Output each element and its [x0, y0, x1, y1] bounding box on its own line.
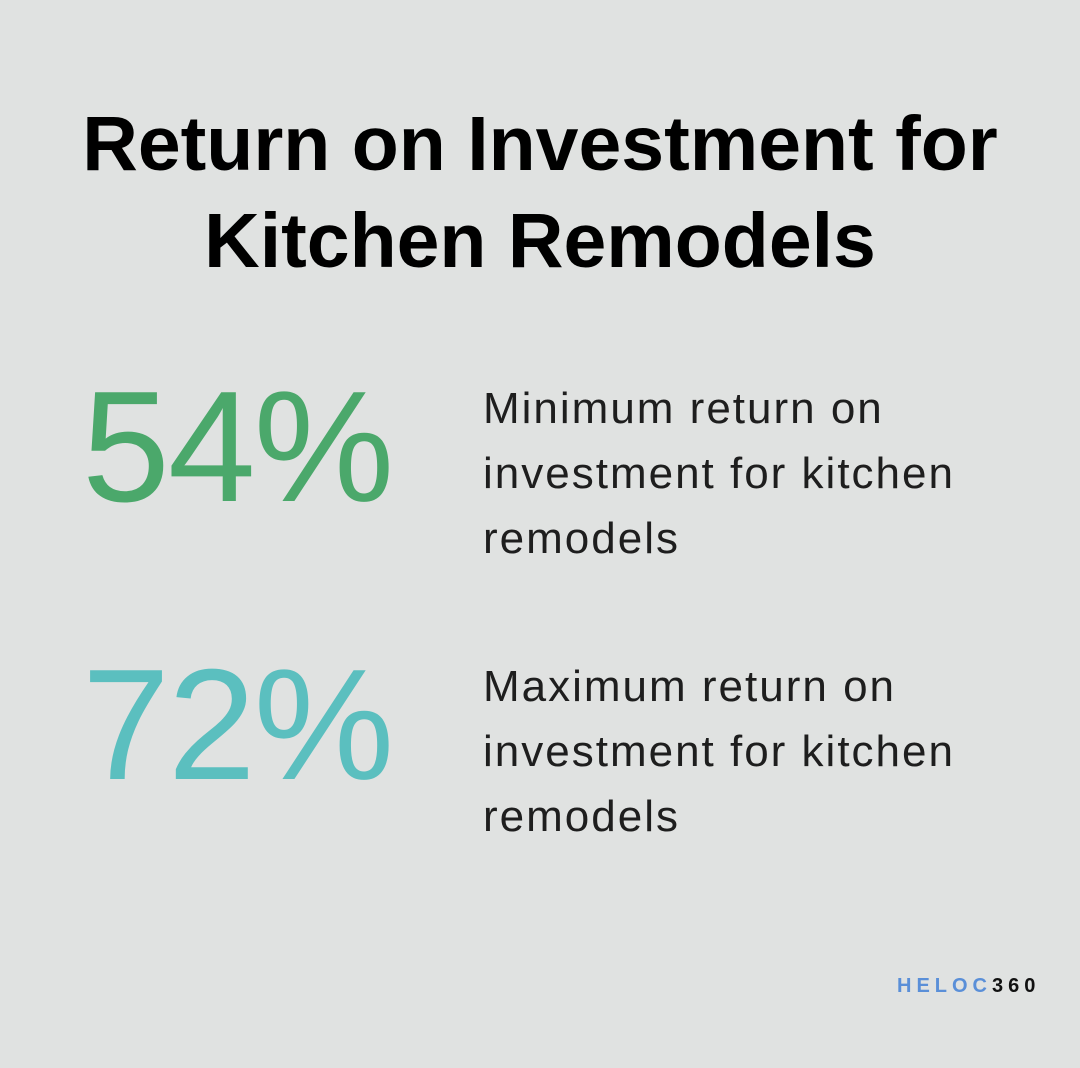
text: maximum: investment for kitchen [483, 727, 955, 776]
text: minimum [483, 384, 955, 563]
text: minimum: remodels [483, 514, 680, 563]
text: minimum: Minimum return on [483, 384, 884, 433]
title: Kitchen Remodels [204, 198, 876, 284]
title [82, 101, 998, 284]
logo: HELOC360 [897, 975, 1040, 997]
stat: 72%: 72% [82, 637, 392, 813]
text: minimum: investment for kitchen [483, 449, 955, 498]
text: maximum [483, 662, 955, 841]
text: maximum: remodels [483, 792, 680, 841]
text: maximum: Maximum return on [483, 662, 896, 711]
title: Return on Investment for [82, 101, 998, 187]
stat: 54%: 54% [82, 359, 392, 535]
